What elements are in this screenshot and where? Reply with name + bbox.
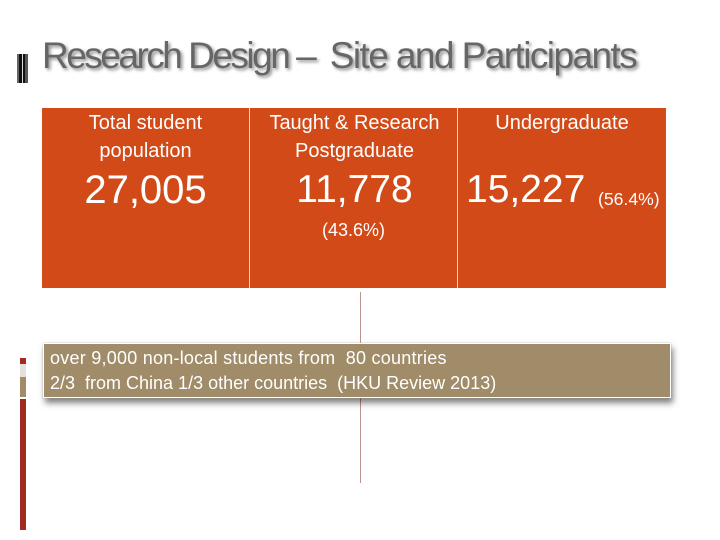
column divider	[249, 108, 250, 288]
cell label: taught and research postgraduate: Taught & Research	[269, 112, 440, 134]
vertical connector line	[360, 292, 361, 483]
sidebar: decorative colour strip	[20, 358, 26, 530]
cell label: undergraduate: Undergraduate	[495, 112, 629, 134]
table: student numbers	[42, 108, 666, 288]
callout: non-local students: over 9,000 non-local students from 80 countries	[50, 348, 447, 368]
cell label: total student population: Total student	[89, 112, 202, 134]
icon: title marker bars	[17, 54, 28, 83]
cell label: taught and research postgraduate: Postgraduate	[295, 140, 414, 162]
callout: non-local students: 2/3 from China 1/3 other countries (HKU Review 2013)	[50, 373, 496, 393]
strip segment: red top	[20, 358, 26, 364]
cell: total student population	[84, 112, 207, 212]
strip segment: tan	[20, 377, 26, 397]
percentage: 43.6%: (43.6%)	[322, 220, 385, 240]
strip segment: red long	[20, 399, 26, 530]
number: 27,005: 27,005	[84, 168, 207, 212]
number: 15,227: 15,227	[466, 168, 585, 211]
cell label: total student population: population	[99, 140, 192, 162]
percentage: 56.4%: (56.4%)	[598, 189, 660, 209]
number: 11,778: 11,778	[296, 168, 413, 211]
cell: taught and research postgraduate	[269, 112, 440, 240]
cell label: total student population	[89, 112, 202, 162]
column divider	[457, 108, 458, 288]
cell label: taught and research postgraduate	[269, 112, 440, 162]
cell: undergraduate	[466, 112, 660, 211]
callout: non-local students	[43, 343, 671, 398]
title: Research Design – Site and Participants	[42, 35, 636, 76]
strip segment: light grey	[20, 364, 26, 377]
